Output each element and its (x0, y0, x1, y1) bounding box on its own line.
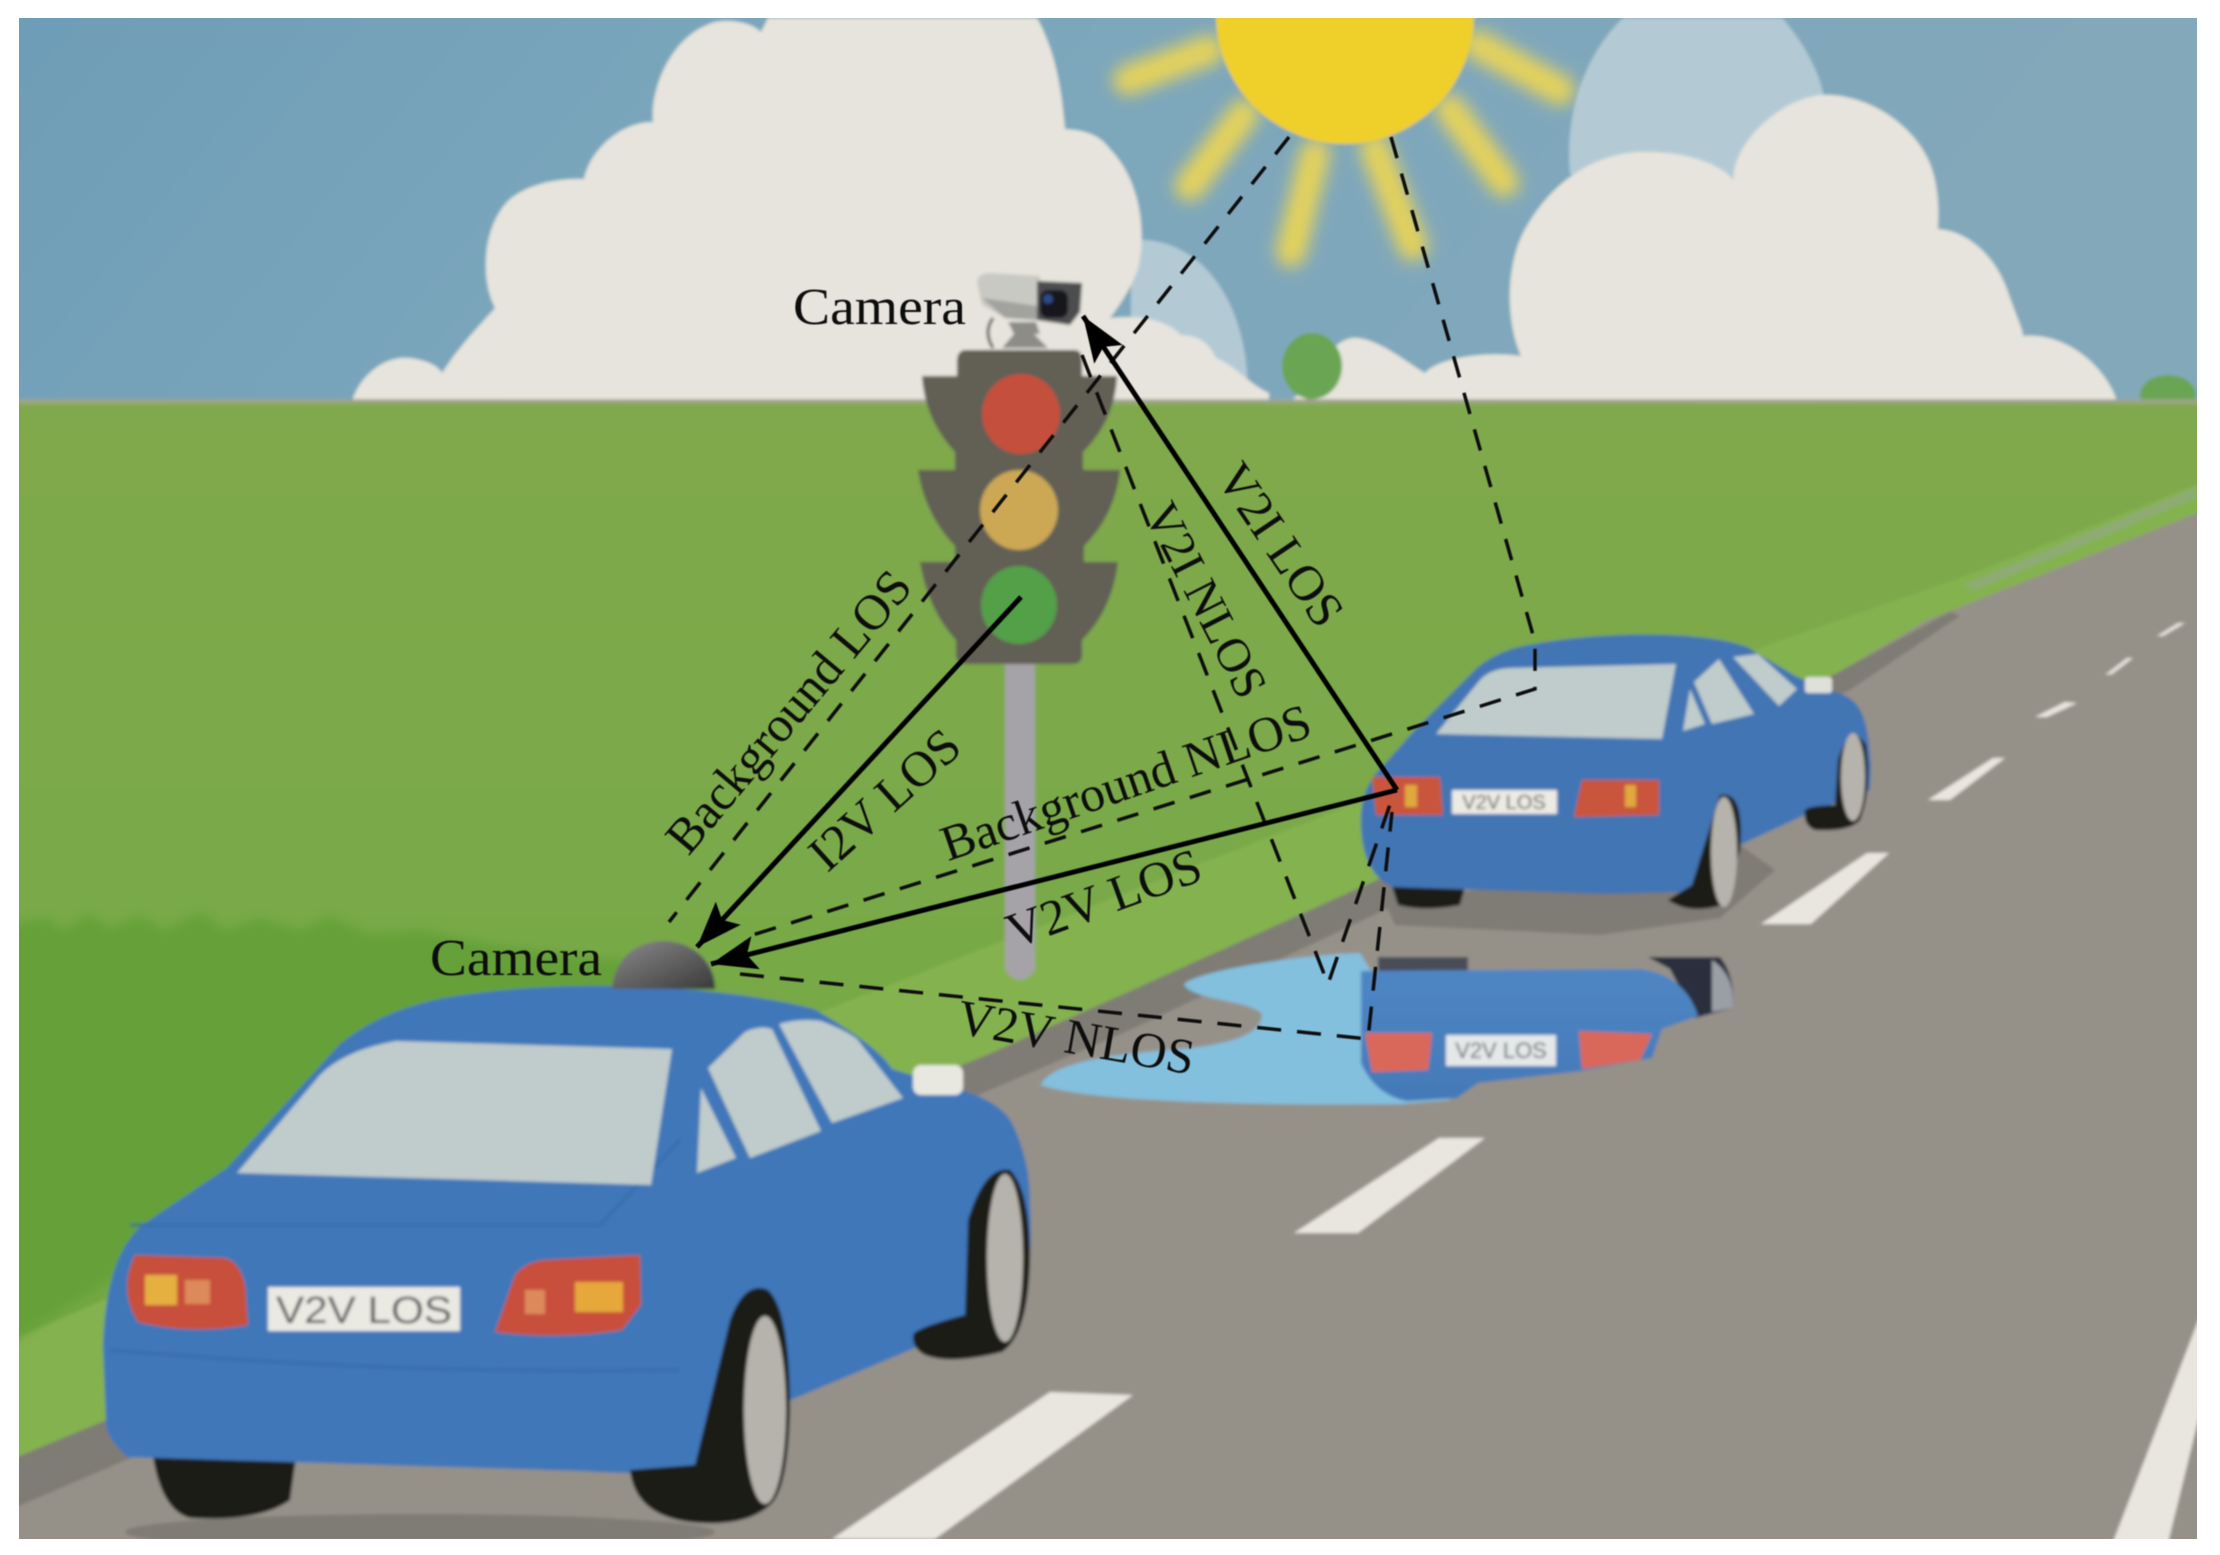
near car windows (237, 1020, 903, 1185)
white clouds right (1290, 95, 2117, 401)
near car body (103, 986, 1031, 1473)
traffic light (918, 350, 1120, 664)
label: V2V NLOS: V2V NLOS (953, 989, 1199, 1085)
road shoulder shadow (0, 612, 1960, 1514)
label: Background NLOS: Background NLOS (933, 693, 1318, 872)
far car shadow (1386, 845, 1775, 935)
dashed link: background LOS (669, 137, 1289, 922)
pale background clouds (1131, 18, 1825, 395)
verge strip (0, 475, 2220, 1464)
near car rear wheel (630, 1288, 790, 1523)
label: V2I LOS: V2I LOS (1206, 452, 1356, 637)
near car left tail light (127, 1255, 248, 1329)
near car trunk crease (110, 1140, 680, 1371)
lane dashes (832, 623, 2210, 1555)
traffic light pole (1005, 660, 1035, 980)
near car ground shadow (125, 1514, 715, 1550)
dashed link: V2V NLOS (740, 812, 1392, 1039)
white clouds left (352, 18, 1269, 401)
label: Background LOS: Background LOS (654, 559, 923, 864)
reflected body (1361, 969, 1698, 1101)
near car right tail light (495, 1255, 641, 1336)
far blue car (1361, 635, 1871, 935)
label: vehicle camera: Camera (430, 930, 602, 987)
road (0, 400, 2220, 1555)
arrow: V2V LOS (711, 790, 1397, 964)
near car rear-left wheel (152, 1450, 297, 1519)
near car mirror (913, 1065, 963, 1095)
label: V2I NLOS: V2I NLOS (1134, 494, 1277, 707)
reflected licence plate: V2V LOS (1455, 1038, 1547, 1063)
near blue car (103, 986, 1031, 1550)
foreground grass tufts (0, 912, 720, 1350)
label: roadside camera: Camera (793, 279, 966, 336)
arrow: I2V LOS (697, 597, 1021, 947)
dashed link: background NLOS (740, 137, 1535, 939)
grass field (19, 401, 2197, 1338)
far car rear-left wheel (1391, 884, 1466, 910)
dashed link: V2I NLOS (1082, 355, 1395, 984)
far car tail lights (1372, 777, 1659, 817)
far car licence plate: V2V LOS (1462, 792, 1546, 814)
far car body (1361, 635, 1871, 894)
channel links and labels (430, 137, 1535, 1085)
sun (1128, 0, 1560, 252)
far car front-right wheel (1805, 733, 1868, 830)
label: V2V LOS: V2V LOS (999, 837, 1209, 959)
sky (0, 0, 2220, 405)
label: I2V LOS: I2V LOS (797, 717, 971, 882)
arrow: V2I LOS (1083, 316, 1397, 790)
car reflection in puddle (1361, 957, 1733, 1101)
puddle (1041, 953, 1450, 1104)
reflected tyres (1378, 957, 1733, 1018)
near car licence plate: V2V LOS (276, 1290, 452, 1332)
near car front wheel (913, 1170, 1030, 1359)
horizon line (0, 399, 2220, 404)
reflected tail lights (1365, 1031, 1652, 1072)
far car mirror (1805, 677, 1832, 693)
icon: roadside camera (977, 273, 1082, 348)
far car rear wheel (1668, 795, 1741, 909)
icon: vehicle roof camera dome (612, 941, 715, 989)
grey streak on verge (1963, 487, 2197, 590)
reflected licence plate (1446, 1035, 1556, 1066)
small tree (2138, 373, 2197, 402)
far car windows (1436, 654, 1797, 739)
distant tree (1282, 333, 1342, 402)
